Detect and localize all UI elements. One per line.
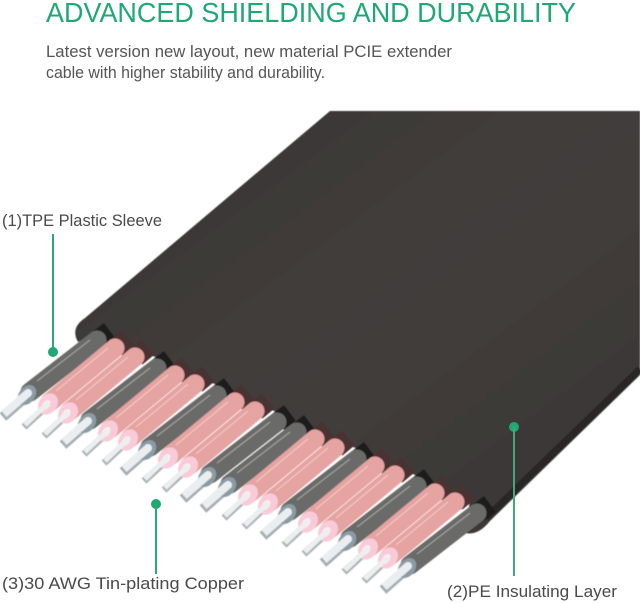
wires and tubes [3, 331, 490, 590]
callout: tin-plating copper: (3)30 AWG Tin-plating Copper [2, 575, 245, 593]
flat cable illustration [3, 111, 640, 590]
callout: PE insulating layer [447, 422, 618, 601]
description text [46, 43, 453, 82]
callout: PE insulating layer: (2)PE Insulating Layer [447, 583, 618, 601]
description text: Latest version new layout, new material PCIE extender [46, 43, 453, 61]
callout: TPE plastic sleeve: (1)TPE Plastic Sleeve [2, 212, 162, 230]
cable sheet: PE insulating layer [75, 111, 640, 534]
callout: tin-plating copper [2, 499, 245, 593]
sheet edge bevel [486, 369, 640, 518]
description text: cable with higher stability and durability. [46, 64, 325, 82]
callout: TPE plastic sleeve [2, 212, 162, 357]
